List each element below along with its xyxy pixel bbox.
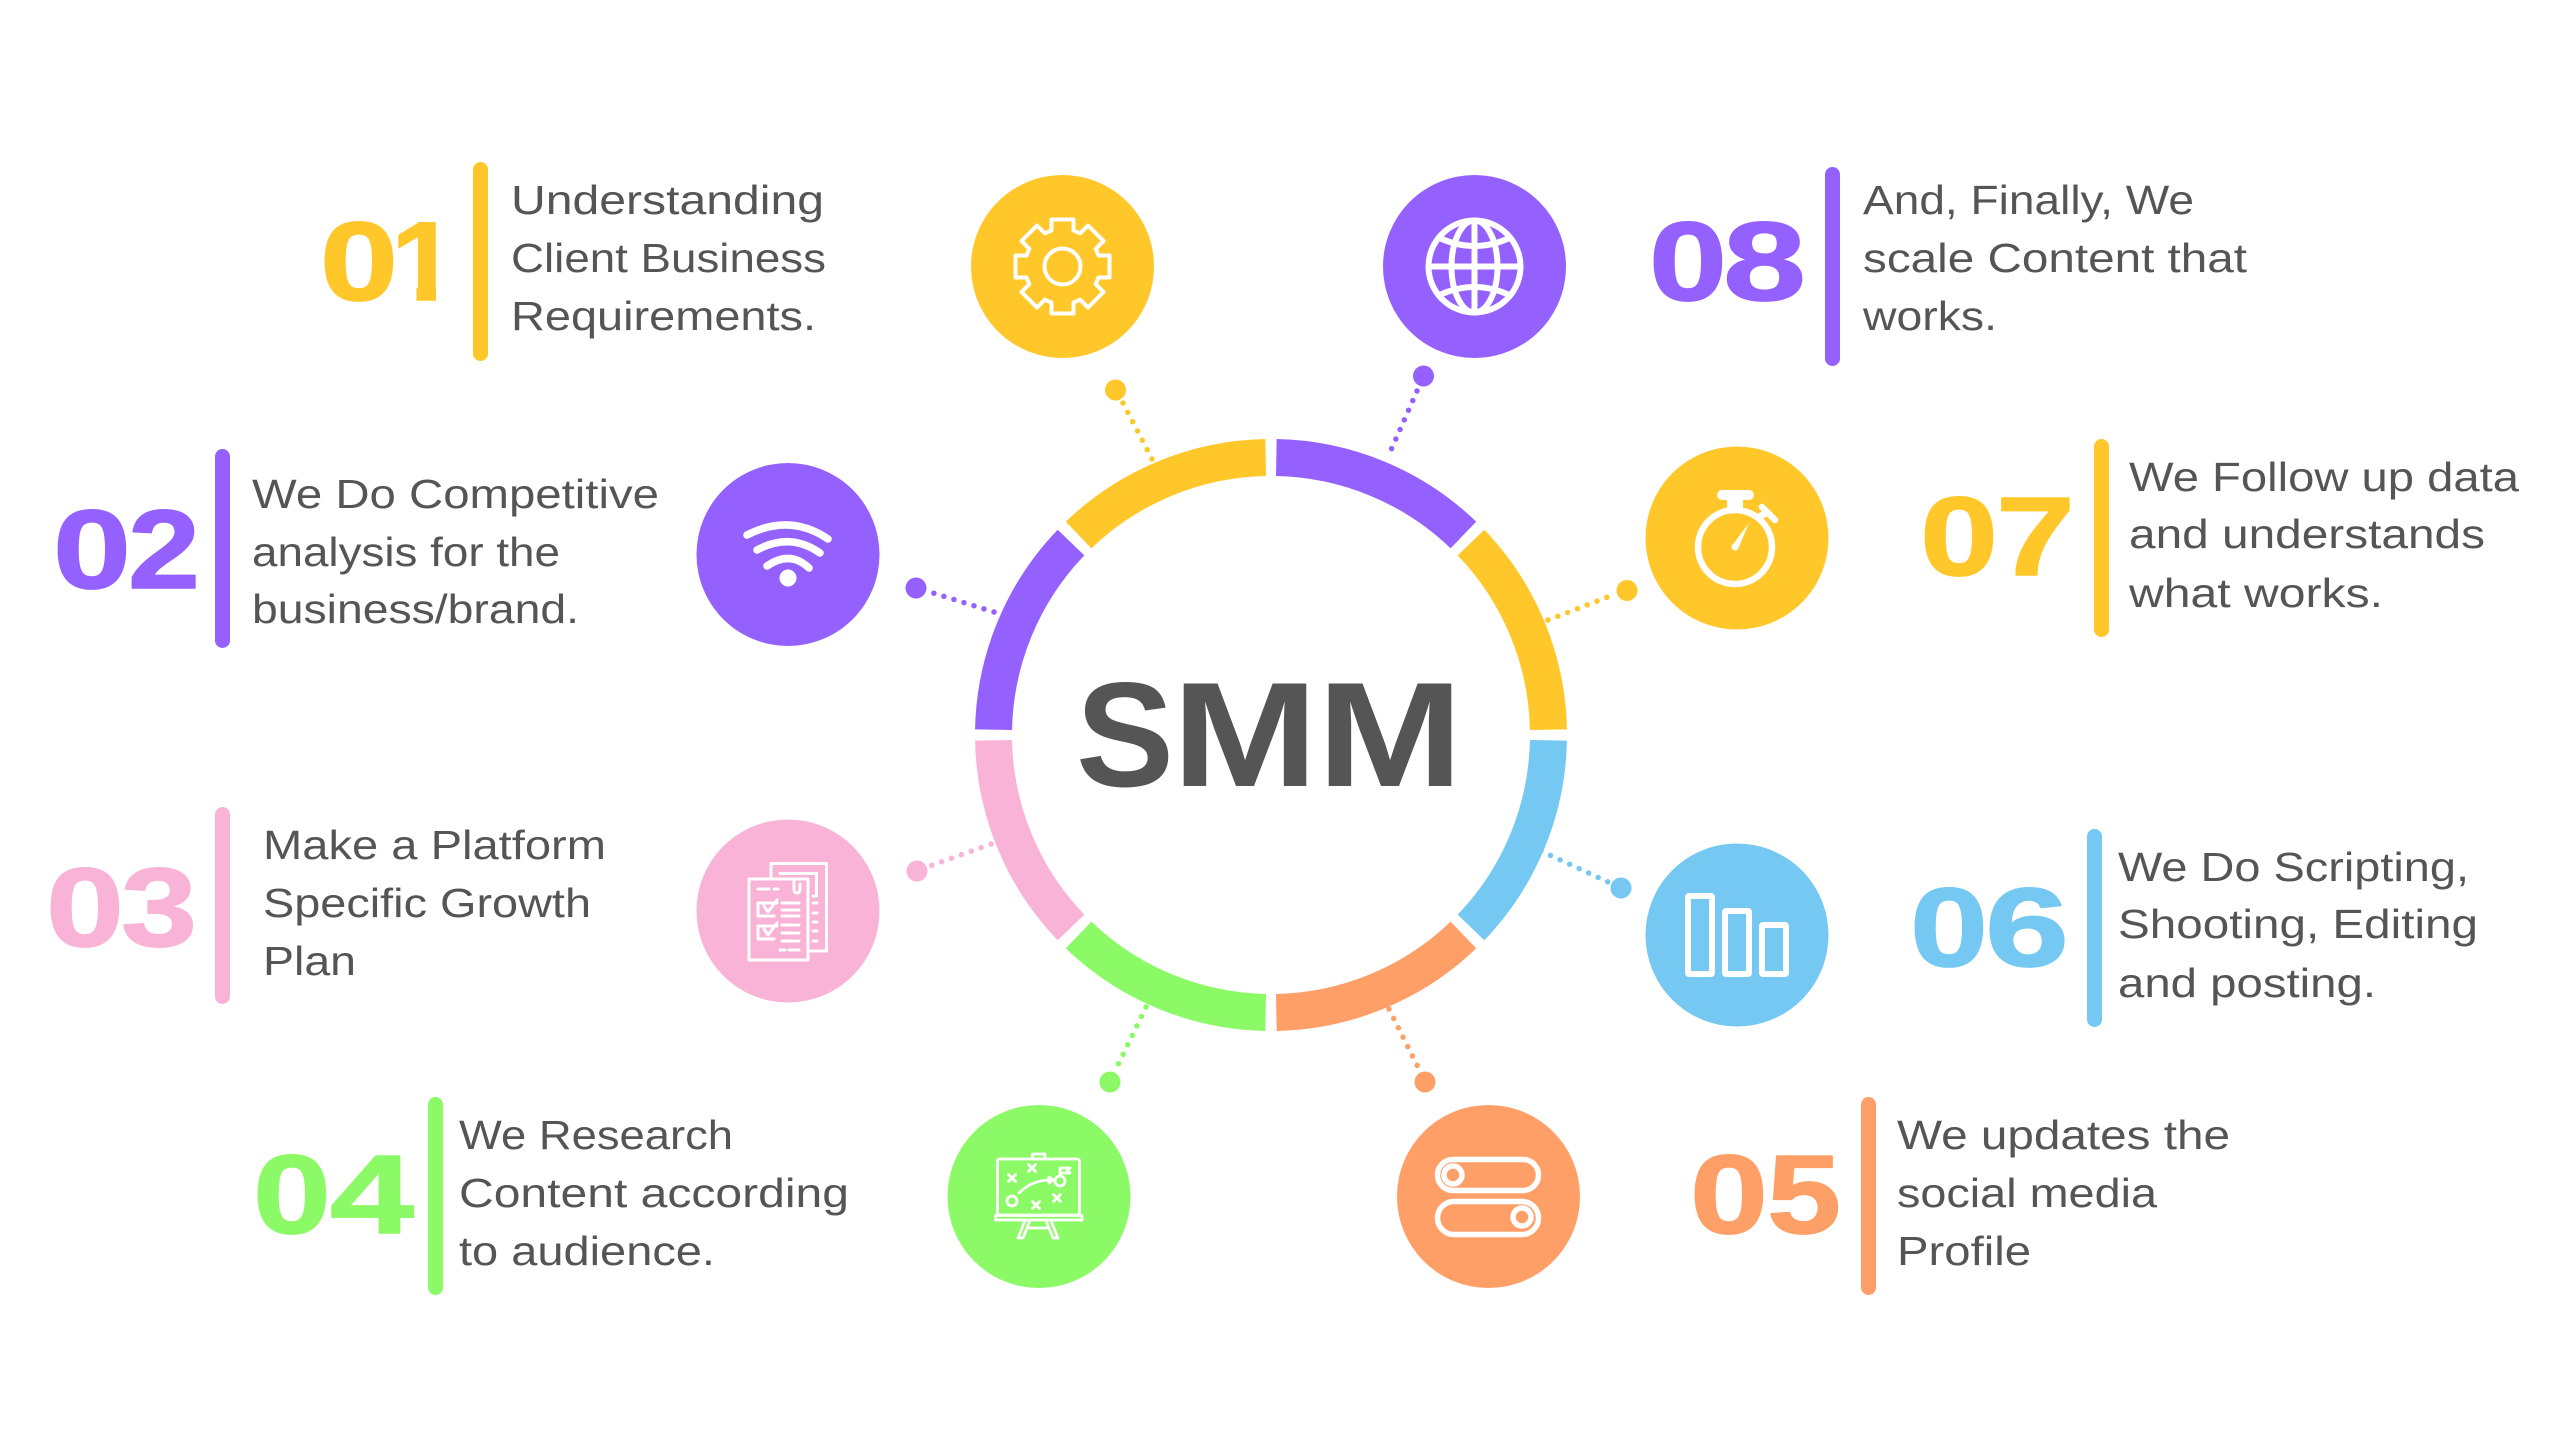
text 08: And, Finally, We xyxy=(1863,177,2194,223)
text 04: Content according xyxy=(459,1170,849,1216)
ring segment 08 purple xyxy=(1276,458,1463,535)
bar 02 xyxy=(215,449,230,648)
number 01: 0 xyxy=(320,199,398,324)
text 06: We Do Scripting, xyxy=(2118,844,2469,890)
number 04: 4 xyxy=(330,1132,414,1257)
text 04: to audience. xyxy=(459,1228,715,1274)
number 08: 0 xyxy=(1649,199,1727,324)
connector 03 xyxy=(906,844,991,882)
number 06: 6 xyxy=(1985,865,2069,990)
text 06: and posting. xyxy=(2118,960,2376,1006)
text 01 xyxy=(511,177,826,339)
number 03: 0 xyxy=(46,845,124,970)
icon: bar chart xyxy=(1646,844,1828,1026)
text 06: Shooting, Editing xyxy=(2118,901,2478,947)
bar 08 xyxy=(1825,167,1840,366)
number 02: 0 xyxy=(53,487,131,612)
connector 08 xyxy=(1388,366,1434,458)
text 05: Profile xyxy=(1897,1228,2031,1274)
step 06 xyxy=(1541,829,2478,1027)
number 04: 0 xyxy=(253,1132,331,1257)
ring segment 03 pink xyxy=(994,740,1071,927)
text 07: and understands xyxy=(2129,511,2485,557)
number 02: 2 xyxy=(128,487,200,612)
text 02: We Do Competitive xyxy=(252,471,659,517)
bar 04 xyxy=(428,1097,443,1295)
text 03: Plan xyxy=(263,938,356,984)
text 04: We Research xyxy=(459,1112,733,1158)
title: M xyxy=(1172,651,1318,818)
number 05: 0 xyxy=(1690,1132,1768,1257)
ring segment 01 yellow xyxy=(1079,458,1266,535)
bar 06 xyxy=(2087,829,2102,1027)
text 05: We updates the xyxy=(1897,1112,2230,1158)
connector 02 xyxy=(906,578,994,612)
number 07: 7 xyxy=(1996,474,2075,599)
connector 04 xyxy=(1100,1007,1146,1092)
step 08 xyxy=(1383,167,2248,458)
icon: globe xyxy=(1383,175,1566,358)
text 08 xyxy=(1862,177,2248,339)
step 03 xyxy=(46,807,991,1004)
icon: stopwatch xyxy=(1646,446,1828,630)
text 02: business/brand. xyxy=(252,586,579,632)
icon: strategy board xyxy=(948,1105,1130,1288)
text 01: Understanding xyxy=(511,177,824,223)
text 05: social media xyxy=(1897,1170,2157,1216)
icon: gear xyxy=(971,175,1154,358)
text 07: what works. xyxy=(2128,570,2383,616)
title: S xyxy=(1076,651,1174,818)
ring segment 07 yellow xyxy=(1471,543,1548,730)
step 04 xyxy=(253,1007,1146,1295)
text 04 xyxy=(459,1112,849,1274)
bar 05 xyxy=(1861,1097,1876,1295)
text 07: We Follow up data xyxy=(2129,454,2519,500)
step 07 xyxy=(1548,439,2519,637)
icon: wifi xyxy=(696,463,880,646)
text 03 xyxy=(263,822,606,984)
connector 07 xyxy=(1548,580,1638,620)
text 06 xyxy=(2118,844,2478,1006)
step 02 xyxy=(53,449,994,648)
text 08: works. xyxy=(1862,293,1997,339)
step 01 xyxy=(320,162,1154,459)
text 03: Make a Platform xyxy=(263,822,606,868)
ring segment 02 purple xyxy=(994,543,1071,730)
connector 06 xyxy=(1541,851,1632,898)
step 05 xyxy=(1389,1009,2230,1295)
text 03: Specific Growth xyxy=(263,880,591,926)
text 07 xyxy=(2128,454,2519,616)
text 05 xyxy=(1897,1112,2230,1274)
text 08: scale Content that xyxy=(1863,235,2248,281)
text 02: analysis for the xyxy=(252,529,560,575)
bar 07 xyxy=(2094,439,2109,637)
icon: toggles xyxy=(1397,1105,1580,1288)
bar 01 xyxy=(473,162,488,361)
number 03: 3 xyxy=(121,845,197,970)
number 05: 5 xyxy=(1767,1132,1841,1257)
ring segment 06 blue xyxy=(1471,740,1548,927)
ring segment 05 orange xyxy=(1276,935,1463,1012)
ring segment 04 green xyxy=(1079,935,1266,1012)
central ring xyxy=(994,458,1548,1012)
text 02 xyxy=(252,471,659,632)
number 07: 0 xyxy=(1920,474,1998,599)
title: M xyxy=(1317,651,1463,818)
text 01: Requirements. xyxy=(511,293,816,339)
connector 05 xyxy=(1389,1009,1436,1092)
number 06: 0 xyxy=(1910,865,1988,990)
connector 01 xyxy=(1105,380,1152,459)
number 08: 8 xyxy=(1723,199,1806,324)
bar 03 xyxy=(215,807,230,1004)
icon: checklist documents xyxy=(696,820,880,1002)
text 01: Client Business xyxy=(511,235,826,281)
number 01: 1 xyxy=(391,199,457,324)
